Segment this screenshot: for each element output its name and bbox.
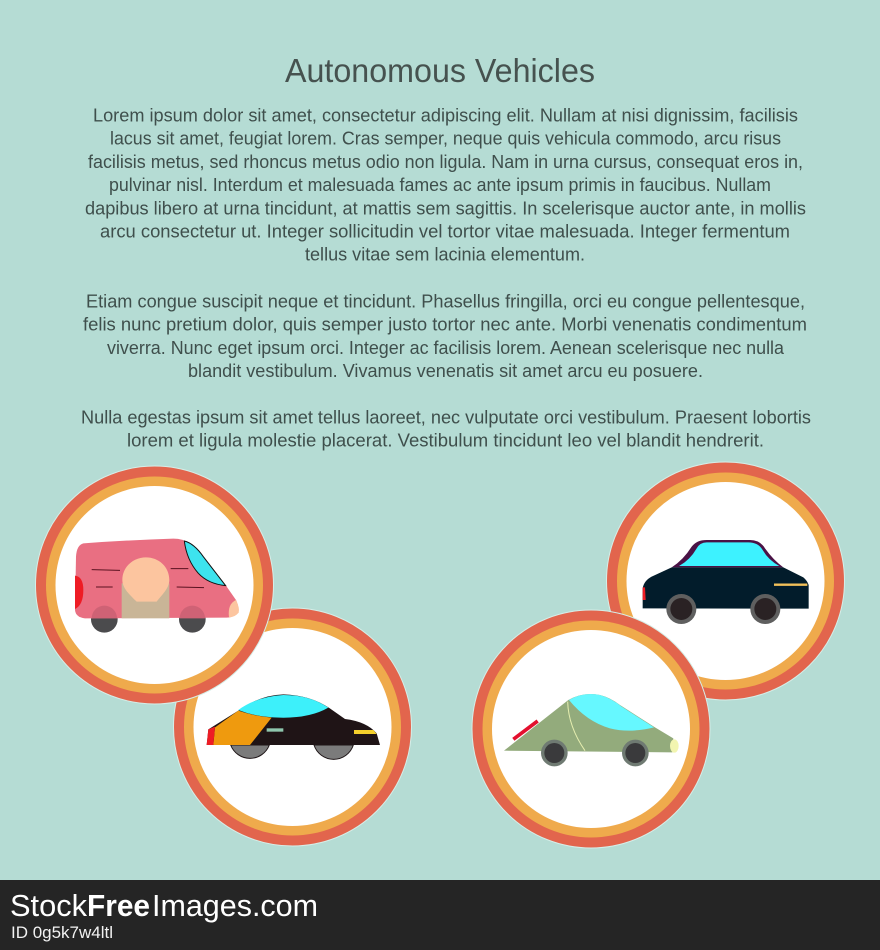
footer brand: Stock xyxy=(10,888,87,923)
paragraph 1: dapibus libero at urna tincidunt, at mattis sem sagittis. In scelerisque auctor ante, in mollis xyxy=(85,198,806,218)
title: Autonomous Vehicles xyxy=(285,52,595,89)
paragraph 2: viverra. Nunc eget ipsum orci. Integer ac facilisis lorem. Aenean scelerisque nec nulla xyxy=(107,338,785,358)
footer brand xyxy=(10,888,318,923)
paragraph 3: lorem et ligula molestie placerat. Vestibulum tincidunt leo vel blandit hendrerit. xyxy=(127,431,764,451)
paragraph 1: tellus vitae sem lacinia elementum. xyxy=(305,245,585,265)
paragraph 3: Nulla egestas ipsum sit amet tellus laoreet, nec vulputate orci vestibulum. Praesent lobortis xyxy=(81,408,811,428)
paragraph 3 xyxy=(81,408,811,451)
paragraph 2: blandit vestibulum. Vivamus venenatis sit amet arcu eu posuere. xyxy=(188,361,703,381)
footer brand: Free xyxy=(87,888,150,923)
paragraph 1 xyxy=(85,106,806,265)
badge: pink van xyxy=(36,466,274,704)
paragraph 2: felis nunc pretium dolor, quis semper justo tortor nec ante. Morbi venenatis condimentum xyxy=(83,315,807,335)
car: pink van xyxy=(75,539,239,633)
badge: sports car with orange panel xyxy=(174,608,412,846)
paragraph 1: lacus sit amet, feugiat lorem. Cras semper, neque quis vehicula commodo, arcu risus xyxy=(110,129,781,149)
car: black and orange coupe xyxy=(207,694,380,759)
car: navy sedan xyxy=(643,540,809,624)
car: green wedge car xyxy=(504,694,679,766)
footer id: ID 0g5k7w4ltl xyxy=(11,923,113,942)
paragraph 1: arcu consectetur ut. Integer sollicitudin vel tortor vitae malesuada. Integer fermentum xyxy=(100,222,790,242)
paragraph 1: facilisis metus, sed rhoncus metus odio non ligula. Nam in urna cursus, consequat eros in, xyxy=(88,152,803,172)
badge: dark sedan xyxy=(606,462,844,700)
paragraph 1: Lorem ipsum dolor sit amet, consectetur adipiscing elit. Nullam at nisi dignissim, facilisis xyxy=(93,106,798,126)
paragraph 2: Etiam congue suscipit neque et tincidunt. Phasellus fringilla, orci eu congue pellentesque, xyxy=(86,292,805,312)
badge: green car xyxy=(472,610,710,848)
footer bar xyxy=(0,880,880,950)
paragraph 2 xyxy=(83,292,807,381)
footer brand: Images.com xyxy=(152,888,318,923)
paragraph 1: pulvinar nisl. Interdum et malesuada fames ac ante ipsum primis in faucibus. Nullam xyxy=(109,175,771,195)
